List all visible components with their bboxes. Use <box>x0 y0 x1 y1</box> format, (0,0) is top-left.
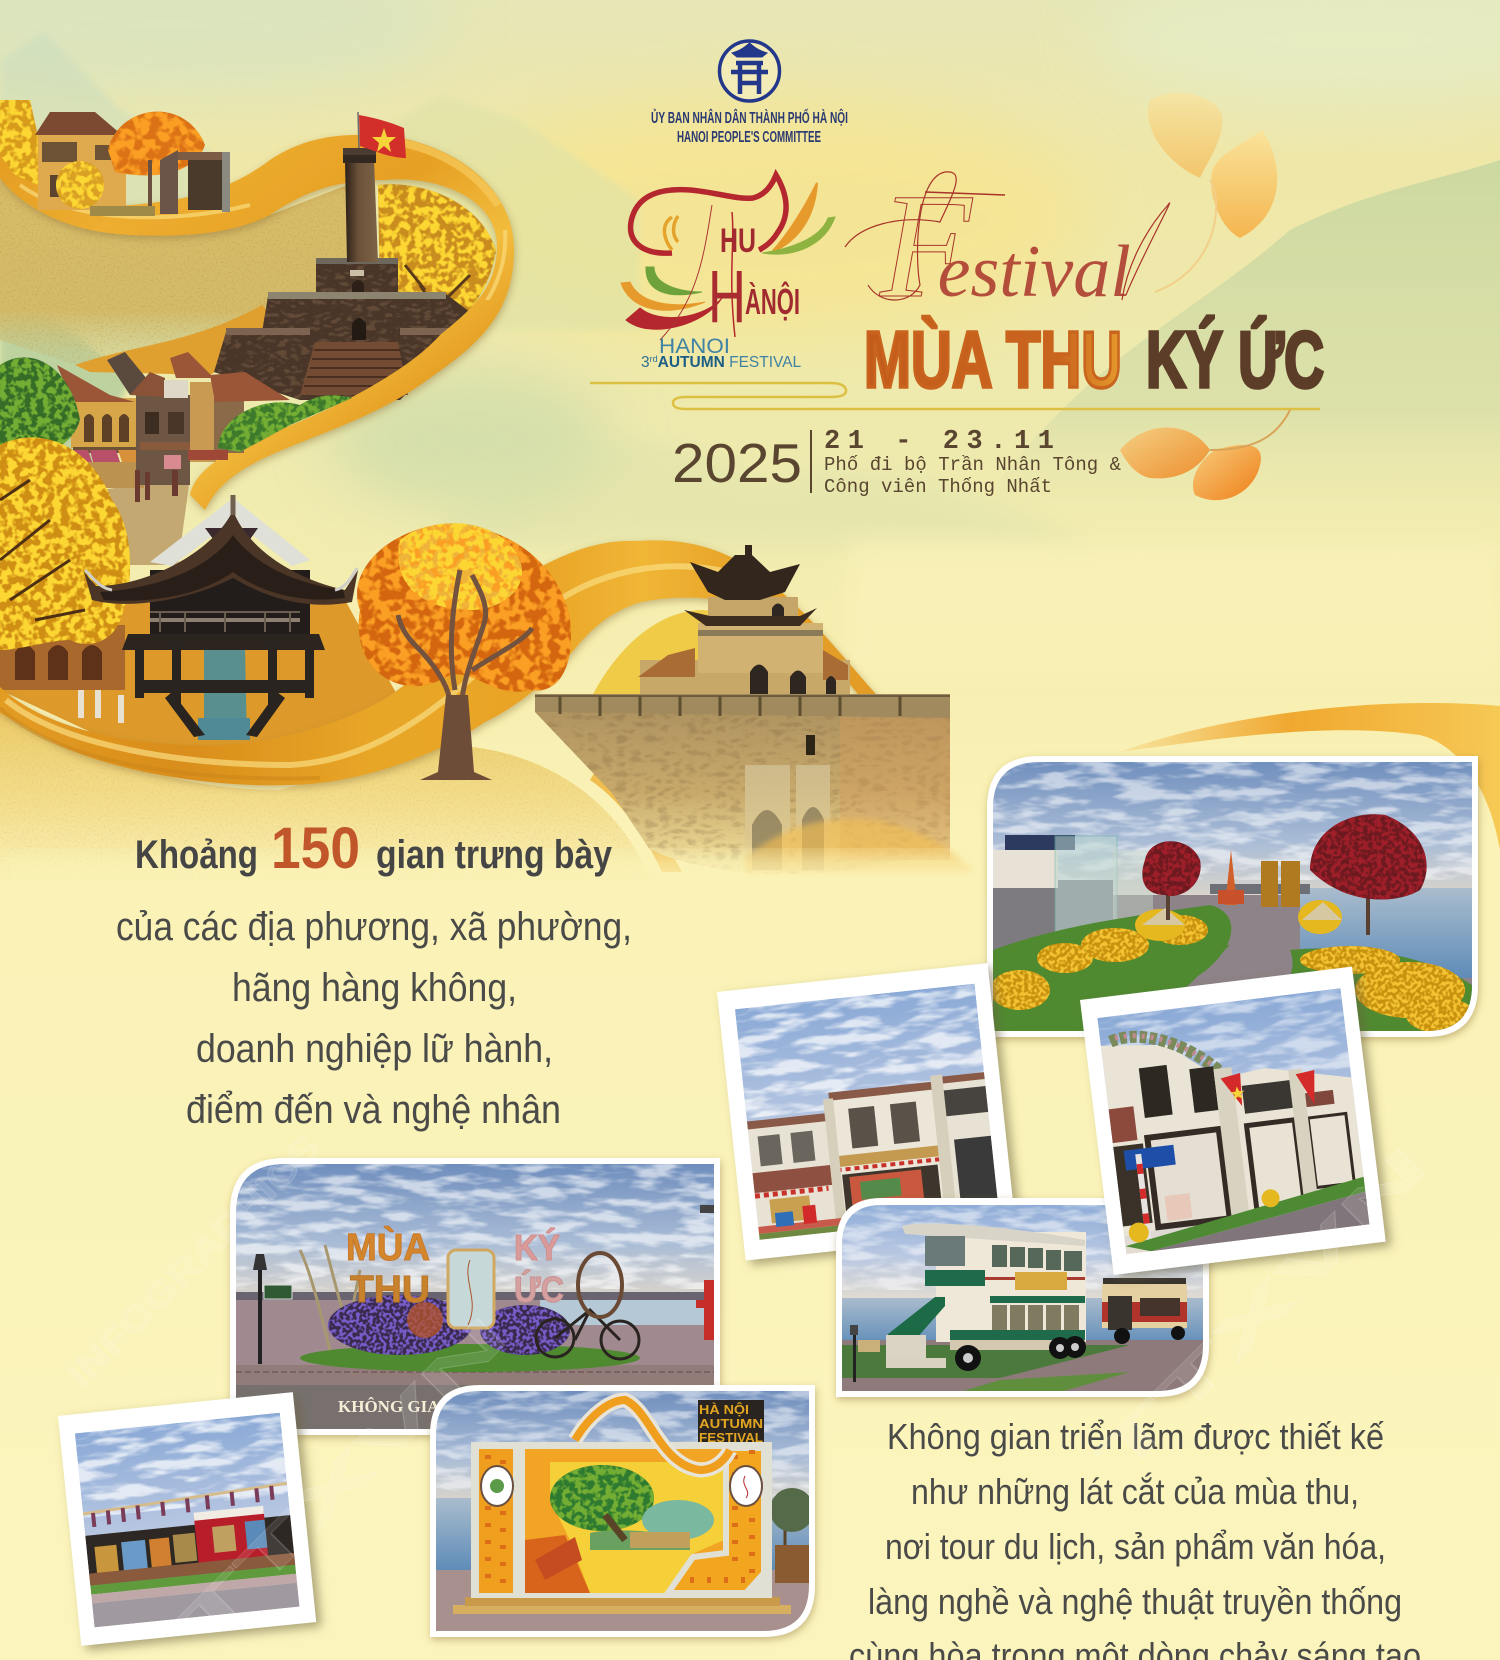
photo: flower installation Mua Thu Ky Uc: THU <box>350 1269 430 1311</box>
text block: 150 exhibition booths <box>116 816 632 1132</box>
photo: old street with Vietnamese flags <box>1080 967 1386 1275</box>
right ribbon wave <box>1120 703 1500 850</box>
photo: double decker bus <box>836 1198 1210 1397</box>
date and venue: Phố đi bộ Trần Nhân Tông & <box>824 454 1121 476</box>
logo: Thu Ha Noi: H <box>708 255 746 338</box>
date and venue: 21 - 23.11 <box>824 427 1054 457</box>
text block: 150 exhibition booths: 150 <box>271 816 360 881</box>
ribbon in front of fortress <box>200 300 504 510</box>
photo: flower installation Mua Thu Ky Uc: KÝ <box>514 1227 560 1268</box>
photo: flower installation Mua Thu Ky Uc: KHÔNG GIAN <box>338 1397 453 1416</box>
photo: autumn painted gate: FESTIVAL <box>699 1430 763 1445</box>
sand hill <box>0 700 650 880</box>
icon: one pillar pagoda <box>84 495 358 740</box>
logo: Thu Ha Noi: ÀNỘI <box>745 280 800 322</box>
illustration: lower ribbon with pagoda, tree and citadel <box>0 437 1000 889</box>
ribbon <box>0 540 893 785</box>
icon: old quarter houses <box>57 352 290 502</box>
main gold ribbon <box>0 135 514 510</box>
title: Mua Thu Ky Uc: MÙA THU <box>864 315 1122 404</box>
arches behind pagoda <box>0 625 125 723</box>
icon: green trees <box>0 357 352 457</box>
header: Hanoi People's Committee: ỦY BAN NHÂN DÂN THÀNH PHỐ HÀ NỘI <box>651 109 848 127</box>
icon: old quarter street <box>100 478 190 565</box>
fade at base of illustration <box>0 855 1000 889</box>
watermark: TTXVN <box>164 1303 520 1658</box>
logo: Thu Ha Noi: HANOI <box>659 335 730 358</box>
hill ribbon tail <box>590 770 682 872</box>
text block: 150 exhibition booths: hãng hàng không, <box>232 966 517 1010</box>
orange glow beneath citadel <box>745 819 975 872</box>
icon: houses and tree, top left <box>0 100 230 216</box>
header: Hanoi People's Committee: HANOI PEOPLE'S COMMITTEE <box>677 129 821 146</box>
icon: lower leaves <box>1120 410 1290 500</box>
decorative gold line <box>590 383 1320 409</box>
icon: yellow tree left <box>0 437 130 650</box>
photo: autumn painted gate: AUTUMN <box>699 1416 763 1431</box>
icon: flag tower and fortress <box>214 112 470 400</box>
photo: flower installation Mua Thu Ky Uc: ỨC <box>514 1268 564 1310</box>
logo: Thu Ha Noi: HU <box>720 222 756 260</box>
header: Hanoi People's Committee <box>651 41 848 146</box>
date and venue <box>672 427 1121 498</box>
logo: Thu Ha Noi: rd <box>650 354 658 364</box>
text block: 150 exhibition booths: của các địa phương, xã phường, <box>116 905 632 949</box>
watermark <box>59 1126 1440 1658</box>
text block: exhibition space description: nơi tour du lịch, sản phẩm văn hóa, <box>885 1526 1386 1567</box>
orange background behind pagoda <box>0 600 400 755</box>
logo: Thu Ha Noi <box>621 175 835 371</box>
icon: Hanoi emblem <box>720 41 780 101</box>
icon: citadel <box>535 545 950 874</box>
logo: Thu Ha Noi: FESTIVAL <box>725 354 802 371</box>
illustration: Hanoi landmarks and golden ribbon, upper part <box>0 100 514 565</box>
title: Festival script: Festival <box>879 163 1131 329</box>
photo: art stalls with flags <box>58 1392 316 1646</box>
back ribbon <box>75 305 290 375</box>
title: Mua Thu Ky Uc: KÝ ỨC <box>1146 315 1324 404</box>
photo: autumn painted gate: HÀ NỘI <box>699 1402 749 1417</box>
photo: shop house with red lanterns <box>717 963 1016 1260</box>
text block: exhibition space description: như những lát cắt của mùa thu, <box>911 1471 1359 1512</box>
text block: 150 exhibition booths: gian trưng bày <box>376 833 613 877</box>
photo: autumn painted gate <box>430 1385 816 1637</box>
text block: exhibition space description <box>849 1416 1421 1660</box>
icon: upper leaves <box>1148 93 1277 292</box>
photo: flower installation Mua Thu Ky Uc: MÙA <box>346 1225 430 1269</box>
yellow inner behind citadel <box>590 610 840 712</box>
sand area <box>0 170 360 365</box>
date and venue: Công viên Thống Nhất <box>824 476 1052 498</box>
text block: exhibition space description: Không gian triển lãm được thiết kế <box>887 1416 1384 1457</box>
photo: flower installation Mua Thu Ky Uc <box>230 1158 720 1435</box>
text block: 150 exhibition booths: doanh nghiệp lữ hành, <box>196 1027 553 1071</box>
text block: 150 exhibition booths: Khoảng <box>135 833 258 877</box>
watermark: INFOGRAPHICS <box>59 1126 328 1396</box>
text block: exhibition space description: làng nghề và nghệ thuật truyền thống <box>868 1581 1402 1622</box>
logo: Thu Ha Noi: 3 <box>641 354 650 371</box>
text block: 150 exhibition booths: điểm đến và nghệ nhân <box>186 1088 561 1132</box>
icon: autumn tree <box>357 523 571 780</box>
watermark: TTXVN <box>1084 1133 1440 1488</box>
date and venue: 2025 <box>672 432 802 494</box>
photo: riverside garden <box>987 756 1480 1037</box>
logo: Thu Ha Noi: AUTUMN <box>658 354 725 371</box>
yellow tree behind flag tower <box>378 184 496 335</box>
